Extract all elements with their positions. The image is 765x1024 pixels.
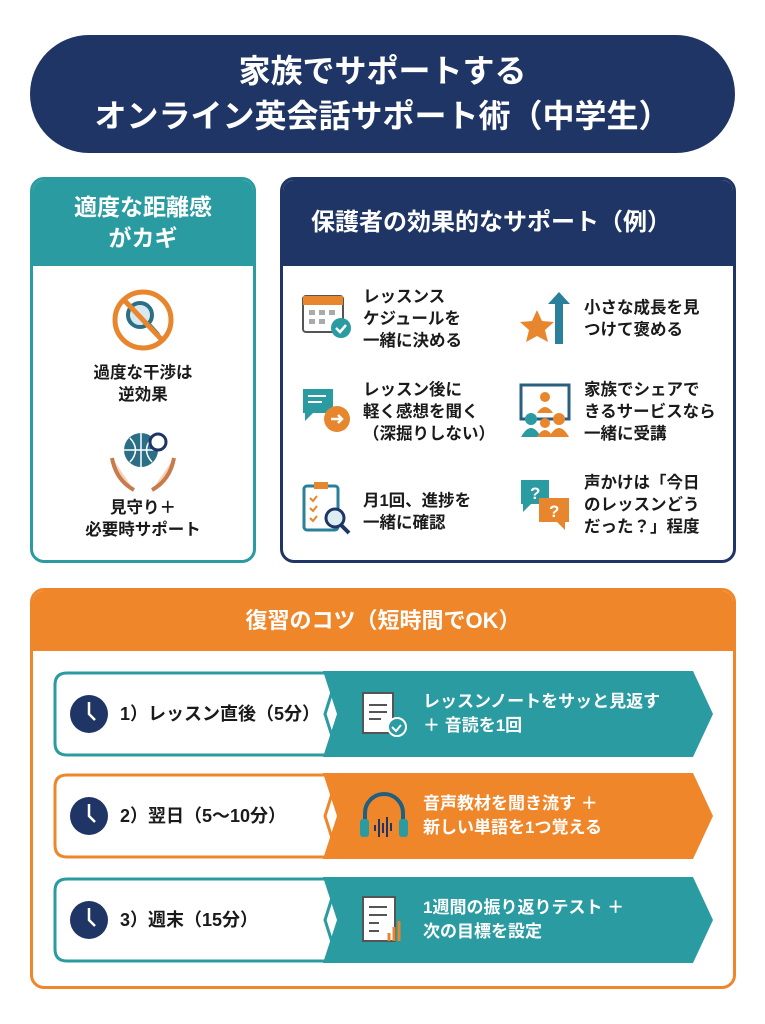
icon: question bubbles: ? — [549, 502, 559, 521]
text: row 2 — [423, 794, 602, 837]
icon: no interference — [112, 290, 174, 350]
text: family share: 一緒に受講 — [584, 425, 666, 443]
row 1 — [54, 671, 713, 757]
label: row 3: 3）週末（15分） — [120, 910, 258, 930]
heading: parent support — [283, 180, 733, 266]
label: row 1: 1）レッスン直後（5分） — [120, 704, 320, 724]
text: row 1: レッスンノートをサッと見返す — [423, 692, 660, 711]
text: talk — [584, 474, 700, 536]
label: row 2: 2）翌日（5〜10分） — [120, 806, 286, 826]
icon: clipboard — [302, 482, 350, 534]
text: row 2: 新しい単語を1つ覚える — [423, 818, 602, 837]
row 3 — [54, 877, 713, 963]
text: praise: つけて褒める — [584, 321, 683, 339]
text: watch over: 必要時サポート — [85, 521, 201, 539]
heading: parent support: 保護者の効果的なサポート（例） — [311, 209, 671, 236]
text: praise — [584, 298, 700, 339]
panel: distance — [30, 177, 256, 563]
text: watch over — [85, 498, 201, 539]
text: no interference: 過度な干渉は — [94, 364, 192, 382]
text: no interference: 逆効果 — [118, 386, 168, 404]
row 2 — [54, 773, 713, 859]
text: row 2: 音声教材を聞き流す ＋ — [423, 794, 598, 813]
heading: distance: がカギ — [108, 225, 178, 251]
text: family share: きるサービスなら — [584, 403, 716, 421]
text: talk: だった？」程度 — [584, 518, 700, 536]
text: row 1: ＋ 音読を1回 — [423, 716, 522, 735]
text: impressions: レッスン後に — [363, 381, 462, 399]
text: family share — [584, 380, 716, 443]
heading: review tips — [33, 591, 733, 651]
text: row 1 — [423, 692, 660, 735]
text: row 3: 1週間の振り返りテスト ＋ — [423, 898, 624, 917]
text: monthly check — [363, 492, 471, 532]
heading: review tips: 復習のコツ（短時間でOK） — [245, 608, 520, 633]
title — [30, 35, 735, 153]
text: family share: 家族でシェアで — [584, 381, 700, 399]
icon: question bubbles: ? — [530, 484, 540, 503]
panel: review tips — [30, 588, 736, 989]
text: impressions: （深掘りしない） — [363, 425, 495, 443]
icon: question bubbles — [521, 480, 569, 530]
text: row 3: 次の目標を設定 — [423, 922, 542, 941]
text: monthly check: 一緒に確認 — [363, 514, 446, 532]
text: schedule: 一緒に決める — [363, 332, 462, 350]
text: impressions: 軽く感想を聞く — [363, 403, 478, 421]
text: schedule — [363, 288, 462, 350]
text: no interference — [94, 364, 192, 404]
icon: family — [520, 384, 570, 437]
text: talk: のレッスンどう — [584, 496, 700, 514]
text: impressions — [363, 380, 495, 443]
text: watch over: 見守り＋ — [110, 499, 176, 517]
text: schedule: レッスンス — [363, 288, 445, 306]
text: schedule: ケジュールを — [363, 310, 461, 328]
icon: speech bubbles — [303, 389, 350, 432]
text: praise: 小さな成長を見 — [584, 299, 700, 317]
icon: calendar — [302, 295, 351, 338]
icon: star arrow — [520, 292, 570, 344]
panel: parent support — [280, 177, 736, 563]
title: オンライン英会話サポート術（中学生） — [94, 98, 670, 134]
heading: distance: 適度な距離感 — [74, 194, 212, 220]
icon: hands globe — [110, 432, 176, 492]
text: monthly check: 月1回、進捗を — [363, 492, 471, 510]
heading: distance — [33, 180, 253, 266]
title: 家族でサポートする — [238, 53, 526, 89]
text: talk: 声かけは「今日 — [584, 474, 700, 492]
text: row 3 — [423, 898, 624, 941]
